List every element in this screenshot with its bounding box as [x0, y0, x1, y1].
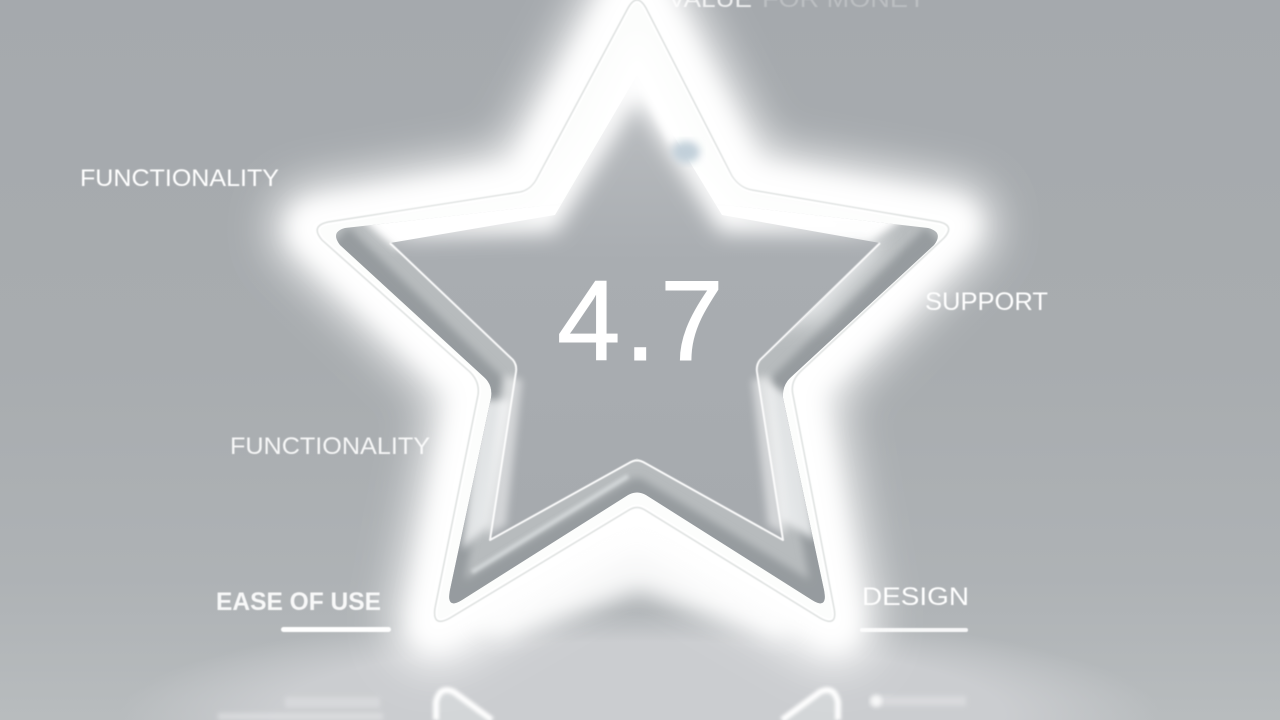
star glow core [315, 0, 952, 625]
label: garbled functionality lower left: FUNCTIONALITY [230, 433, 430, 460]
label: ease of use [216, 588, 391, 632]
star rim line [317, 0, 949, 621]
label: top, cut off by the frame [668, 0, 926, 13]
star outer glow [315, 0, 952, 625]
label: design: DESIGN [862, 583, 969, 611]
rating value: 4.7 [557, 258, 727, 385]
star [300, 0, 980, 640]
top light streak [640, 70, 676, 140]
label: support: SUPPORT [925, 288, 1048, 316]
inner face outline [390, 243, 880, 540]
inner face side glow [487, 375, 787, 535]
floor reflection [218, 690, 966, 720]
glow under the star between the feet [470, 520, 800, 640]
star inner face [390, 75, 880, 540]
star recessed bevel [336, 216, 938, 604]
blue highlight spot [672, 141, 700, 163]
inner face top glow [370, 30, 900, 236]
label: design [860, 583, 969, 632]
star white body [317, 0, 949, 621]
label: functionality upper left: FUNCTIONALITY [80, 165, 279, 192]
label: ease of use: EASE OF USE [216, 588, 381, 616]
